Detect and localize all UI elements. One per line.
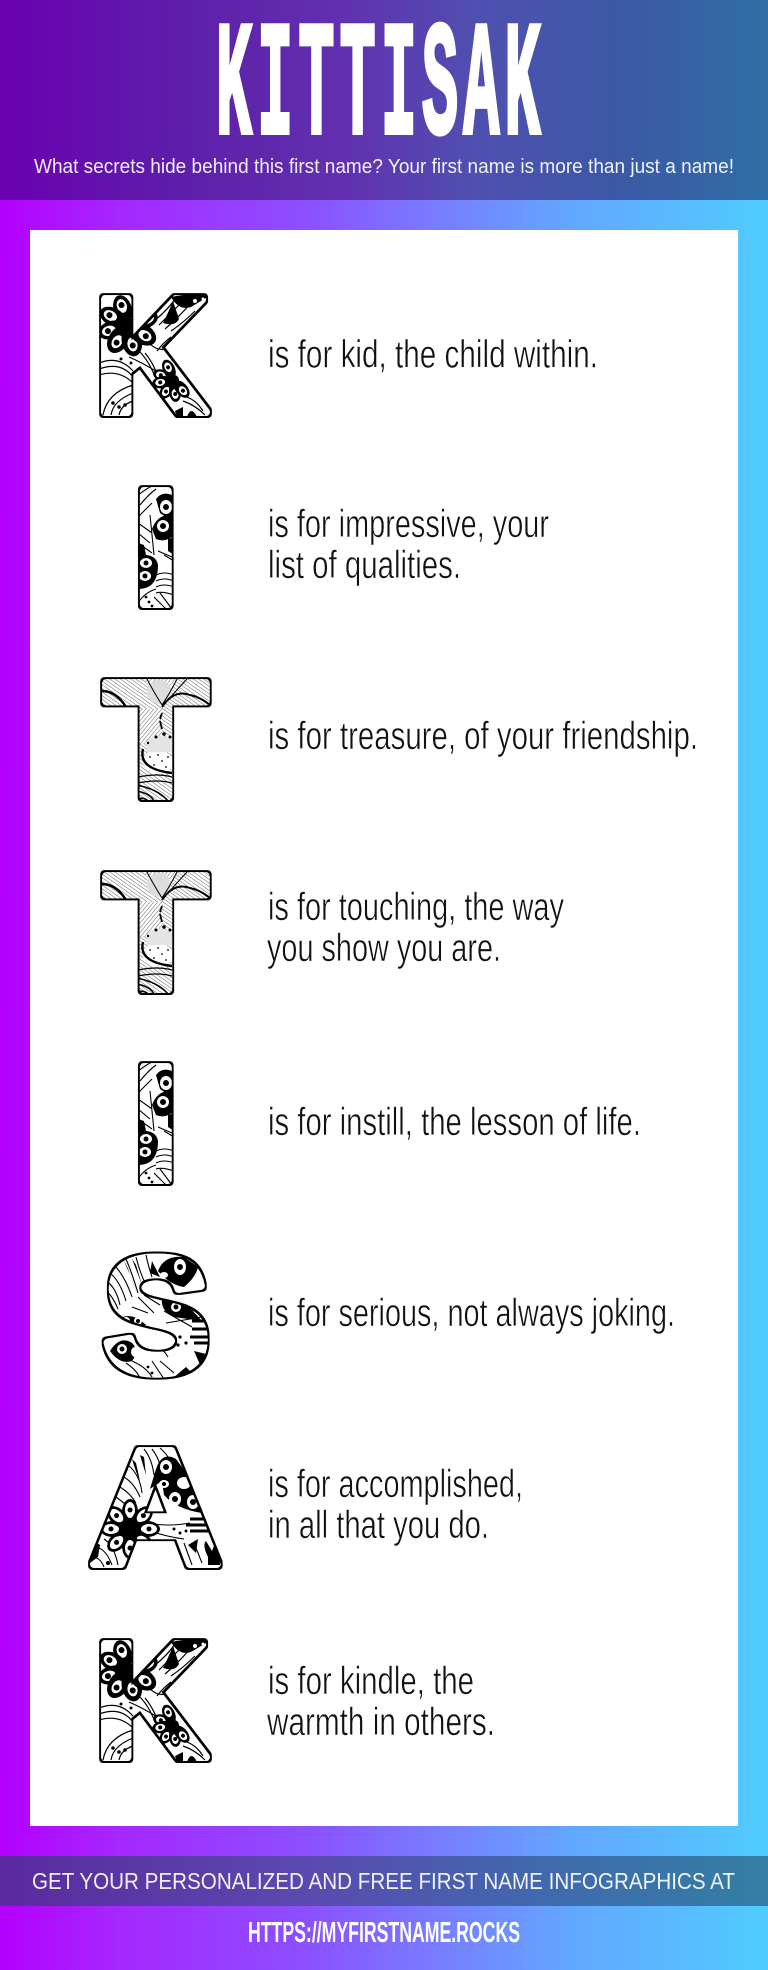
icon: decorated letter I	[138, 1061, 174, 1186]
letter I row	[138, 485, 548, 610]
panel: letters	[30, 230, 738, 1826]
header band	[0, 0, 768, 200]
icon: decorated letter K	[99, 1638, 212, 1763]
letter K row 2	[99, 1638, 492, 1763]
letter A row	[88, 1445, 520, 1570]
letter S row	[102, 1252, 672, 1380]
subtitle: What secrets hide behind this first name? Your first name is more than just a name!	[34, 155, 734, 178]
letter I row 2	[138, 1061, 638, 1186]
footer url: HTTPS://MYFIRSTNAME.ROCKS	[248, 1917, 520, 1949]
text: kindle: warmth in others.	[266, 1701, 495, 1744]
text: accomplished	[268, 1463, 523, 1547]
text: impressive	[268, 503, 549, 587]
text: instill: is for instill, the lesson of life.	[268, 1101, 641, 1144]
letter K row	[99, 293, 596, 418]
icon: decorated letter A	[88, 1445, 223, 1570]
text: kindle	[266, 1660, 495, 1744]
title: KITTISAK	[216, 0, 541, 182]
icon: decorated letter T	[100, 677, 212, 802]
text: kid: is for kid, the child within.	[268, 334, 598, 376]
letter T row 2	[100, 870, 564, 995]
text: impressive: is for impressive, your	[268, 503, 549, 546]
text: touching	[267, 886, 565, 970]
icon: decorated letter I	[138, 485, 174, 610]
icon: decorated letter S	[102, 1252, 210, 1380]
text: kindle: is for kindle, the	[268, 1660, 474, 1703]
text: accomplished: is for accomplished,	[268, 1463, 523, 1506]
text: impressive: list of qualities.	[268, 544, 461, 587]
text: touching: you show you are.	[267, 927, 501, 970]
icon: decorated letter K	[99, 293, 212, 418]
footer band	[0, 1856, 768, 1906]
text: accomplished: in all that you do.	[268, 1504, 489, 1547]
letter T row	[100, 677, 696, 802]
icon: decorated letter T	[100, 870, 212, 995]
text: touching: is for touching, the way	[268, 886, 565, 929]
